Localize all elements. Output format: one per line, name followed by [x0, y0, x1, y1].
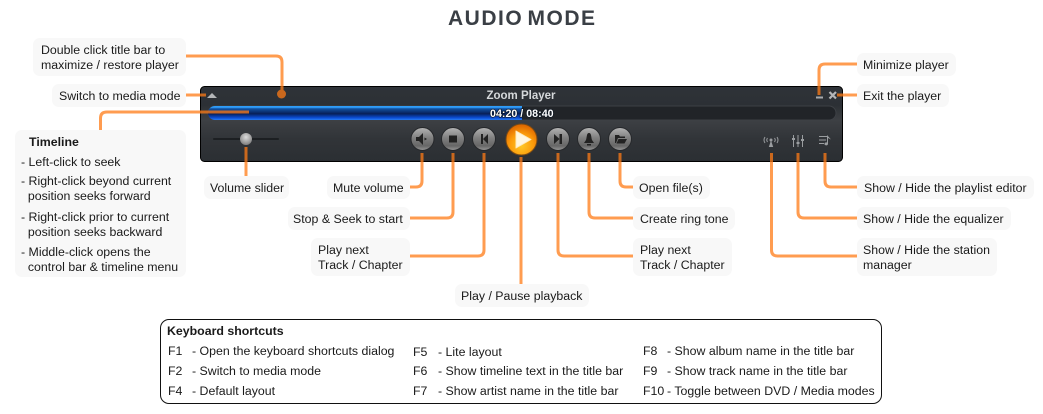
label: mute volume [327, 176, 410, 199]
button: previous [472, 128, 496, 150]
label: play next left [311, 238, 410, 276]
label: exit the player: Exit the player [863, 89, 941, 103]
button: open file [608, 128, 632, 150]
button: play [506, 124, 537, 155]
volume slider [213, 133, 279, 145]
timeline item: middle-click [21, 245, 178, 274]
icon: media mode arrow [207, 93, 217, 98]
label: open files: Open file(s) [639, 181, 703, 195]
connector: switch to media mode [186, 94, 206, 96]
label: exit the player [857, 84, 949, 107]
label: play pause: Play / Pause playback [461, 289, 582, 303]
connector: timeline [100, 112, 249, 130]
label: minimize player [857, 53, 956, 76]
panel: keyboard shortcuts [160, 319, 882, 404]
column 3: - Show track name in the title bar [667, 364, 847, 378]
connector: stop [410, 153, 453, 218]
panel: player window [200, 86, 842, 162]
label: play next right: Play next [640, 243, 691, 257]
button: stop [442, 128, 464, 150]
timeline progress [208, 106, 522, 120]
timeline heading: Timeline [29, 135, 79, 149]
button: mute [411, 128, 434, 150]
connector: minimize [819, 64, 857, 95]
icon: playlist [819, 135, 831, 145]
column 1: F4 [168, 384, 182, 398]
timeline item: right-click backward: - Right-click prior to current [21, 210, 169, 224]
label: station manager: Show / Hide the station [863, 243, 990, 257]
title: AUDIO MODE [448, 7, 596, 30]
column 3 [643, 344, 875, 398]
label: play next right: Track / Chapter [640, 258, 725, 272]
connector: previous [410, 153, 484, 256]
icon: station manager [764, 137, 778, 146]
column 1: F1 [168, 344, 182, 358]
timeline item: middle-click: - Middle-click opens the [21, 245, 151, 259]
column 2: - Show artist name in the title bar [438, 384, 618, 398]
label: play next right [633, 238, 732, 276]
label: stop and seek: Stop & Seek to start [293, 212, 403, 226]
connector: volume slider [244, 147, 248, 176]
player title: Zoom Player [486, 90, 556, 102]
column 2: - Lite layout [438, 345, 502, 359]
label: equalizer [857, 207, 1011, 230]
label: double click title bar: Double click title bar to [41, 43, 165, 57]
column 1: - Switch to media mode [192, 364, 321, 378]
connector: next [558, 153, 633, 256]
label: station manager: manager [863, 258, 912, 272]
connector: station manager [772, 153, 857, 256]
icon: equalizer [792, 135, 804, 147]
column 1: F2 [168, 364, 182, 378]
label: volume slider: Volume slider [210, 181, 284, 195]
connector: playlist [825, 153, 857, 187]
label: create ring tone [633, 207, 735, 230]
connector: mute [410, 153, 422, 187]
column 3: F8 [643, 344, 657, 358]
panel: timeline help [15, 130, 186, 277]
timeline item: right-click forward: position seeks forward [28, 189, 151, 203]
label: playlist editor: Show / Hide the playlist editor [864, 181, 1027, 195]
label: equalizer: Show / Hide the equalizer [863, 212, 1004, 226]
label: minimize player: Minimize player [863, 58, 949, 72]
column 1: - Open the keyboard shortcuts dialog [192, 344, 394, 358]
label: stop and seek [288, 207, 410, 230]
label: station manager [857, 238, 997, 276]
connector: play [520, 157, 522, 284]
column 2: F6 [413, 364, 427, 378]
label: double click title bar: maximize / restore player [41, 58, 179, 72]
column 3: - Toggle between DVD / Media modes [667, 384, 875, 398]
column 1: - Default layout [192, 384, 275, 398]
connector: double click title bar [186, 56, 286, 98]
timeline item: right-click forward: - Right-click beyond current [21, 174, 171, 188]
column 1 [168, 344, 394, 398]
column 2: - Show timeline text in the title bar [438, 364, 623, 378]
icon: minimize [816, 96, 823, 98]
connector: open file [620, 153, 633, 187]
label: double click title bar [33, 38, 186, 76]
column 3: F9 [643, 364, 657, 378]
timeline item: right-click forward [21, 174, 172, 203]
timeline item: middle-click: control bar & timeline menu [28, 260, 178, 274]
label: play next left: Play next [318, 243, 369, 257]
column 2: F5 [413, 345, 427, 359]
button: ring tone [578, 128, 600, 150]
connector: exit [837, 94, 857, 96]
label: mute volume: Mute volume [333, 181, 404, 195]
shortcuts heading: Keyboard shortcuts [167, 324, 284, 338]
timeline item: right-click backward: position seeks backward [28, 225, 162, 239]
icon: close [830, 92, 836, 98]
label: switch to media mode: Switch to media mode [59, 89, 180, 103]
timeline track [208, 106, 836, 120]
button: next [546, 128, 570, 150]
label: play pause [455, 284, 589, 307]
label: playlist editor [857, 176, 1034, 199]
timeline time: 04:20 / 08:40 [490, 108, 554, 120]
column 2: F7 [413, 384, 427, 398]
label: play next left: Track / Chapter [318, 258, 403, 272]
label: volume slider [204, 176, 289, 199]
column 3: F10 [643, 384, 664, 398]
connector: equalizer [798, 153, 857, 218]
label: open files [633, 176, 710, 199]
label: switch to media mode [52, 84, 186, 107]
timeline item: left-click: - Left-click to seek [21, 155, 120, 169]
column 3: - Show album name in the title bar [667, 344, 854, 358]
timeline item: right-click backward [21, 210, 170, 239]
column 2 [413, 345, 624, 398]
label: create ring tone: Create ring tone [640, 212, 729, 226]
connector: ring tone [589, 153, 633, 218]
